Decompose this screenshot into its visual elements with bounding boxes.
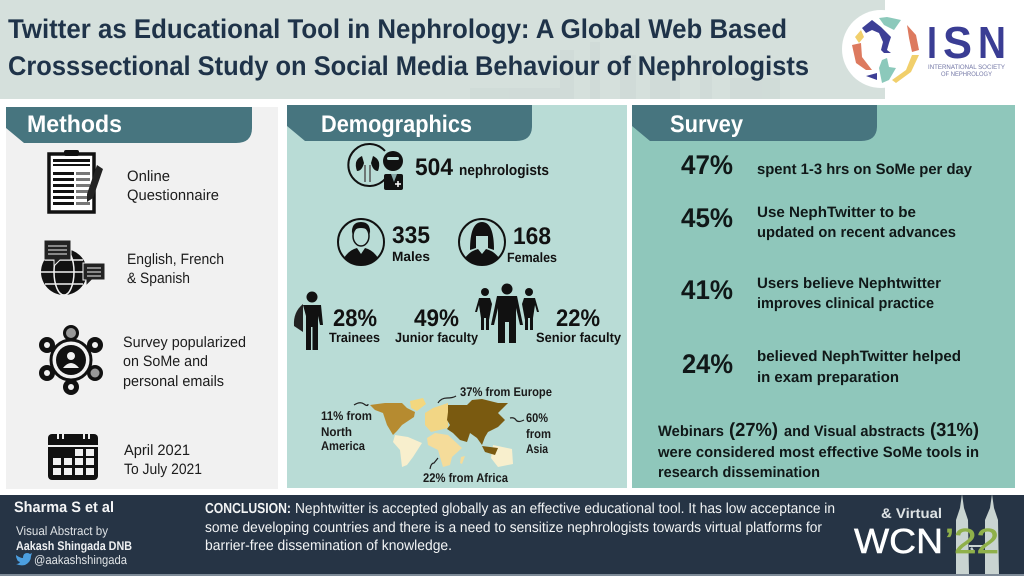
authors and credit: Visual Abstract by bbox=[16, 524, 109, 538]
text: webinars and visual abstracts: research dissemination bbox=[658, 464, 820, 481]
stat: 47%: 47% bbox=[681, 150, 733, 180]
ISN logo bbox=[842, 10, 1006, 88]
map labels: 22% from Africa bbox=[423, 471, 509, 485]
stat: trainees bbox=[329, 305, 380, 345]
stat: total nephrologists: nephrologists bbox=[459, 162, 549, 179]
icon: faculty group bbox=[475, 284, 539, 343]
survey heading tab bbox=[632, 105, 877, 141]
stat: males: 335 bbox=[392, 222, 430, 249]
text: webinars and visual abstracts: (31%) bbox=[930, 420, 979, 441]
conclusion text bbox=[205, 501, 835, 554]
icon: globe with speech bubbles bbox=[41, 240, 105, 295]
map labels: North bbox=[321, 425, 352, 439]
icon: kidney and doctor bbox=[348, 144, 403, 190]
stat: 45% bbox=[681, 203, 956, 241]
icon: social network bbox=[39, 325, 103, 395]
text: webinars and visual abstracts: and Visual abstracts bbox=[784, 423, 925, 440]
conclusion text: CONCLUSION: bbox=[205, 501, 291, 517]
text: languages bbox=[127, 251, 224, 287]
stat: 41%: Users believe Nephtwitter bbox=[757, 275, 941, 292]
stat: 45%: Use NephTwitter to be bbox=[757, 204, 916, 221]
icon: trainee with backpack bbox=[294, 292, 323, 350]
WCN 22 logo: & Virtual bbox=[881, 505, 942, 521]
WCN 22 logo: WCN bbox=[854, 522, 943, 561]
conclusion text: barrier-free dissemination of knowledge. bbox=[205, 538, 452, 554]
map labels: 60% bbox=[526, 411, 548, 425]
footer band bbox=[0, 494, 1024, 576]
icon: female doctor bbox=[459, 219, 505, 266]
stat: females: 168 bbox=[513, 223, 551, 250]
map labels: 11% from bbox=[321, 409, 372, 423]
stat: senior faculty bbox=[536, 305, 621, 345]
text: study dates: To July 2021 bbox=[124, 461, 202, 478]
text: survey popularized: personal emails bbox=[123, 373, 224, 390]
methods heading tab: Methods bbox=[27, 111, 122, 138]
ISN wordmark: INTERNATIONAL SOCIETY bbox=[928, 64, 1006, 71]
WCN 22 logo: ’22 bbox=[945, 522, 999, 561]
map labels bbox=[321, 385, 552, 485]
panel: survey bbox=[632, 105, 1015, 488]
stat: 24%: in exam preparation bbox=[757, 369, 899, 386]
stat: total nephrologists bbox=[415, 154, 549, 181]
text: webinars and visual abstracts: were considered most effective SoMe tools in bbox=[657, 444, 979, 461]
ISN wordmark: I bbox=[927, 17, 937, 68]
text: survey popularized: Survey popularized bbox=[123, 334, 246, 351]
text: webinars and visual abstracts: Webinars bbox=[658, 423, 724, 440]
text: online questionnaire: Online bbox=[127, 168, 170, 185]
stat: 47%: spent 1-3 hrs on SoMe per day bbox=[757, 161, 973, 178]
ISN wordmark bbox=[927, 17, 1006, 78]
text: webinars and visual abstracts bbox=[657, 420, 979, 481]
conclusion text: Nephtwitter is accepted globally as an effective educational tool. It has low acceptance in bbox=[295, 501, 835, 517]
stat: total nephrologists: 504 bbox=[415, 154, 454, 181]
stat: junior faculty bbox=[395, 305, 478, 345]
authors and credit bbox=[14, 499, 132, 567]
text: study dates bbox=[124, 442, 202, 478]
text: online questionnaire bbox=[127, 168, 219, 204]
icon: twin towers bbox=[956, 494, 999, 574]
text: webinars and visual abstracts: (27%) bbox=[729, 420, 778, 441]
stat: 41% bbox=[681, 275, 941, 312]
text: survey popularized: on SoMe and bbox=[123, 353, 208, 370]
stat: junior faculty: 49% bbox=[414, 305, 459, 332]
stat: 24%: 24% bbox=[682, 349, 733, 379]
WCN 22 logo bbox=[854, 494, 999, 574]
map labels: America bbox=[321, 439, 366, 453]
icon: twitter bird bbox=[16, 553, 32, 565]
stat: trainees: 28% bbox=[333, 305, 377, 332]
stat: 45%: 45% bbox=[681, 203, 733, 233]
map arrows bbox=[354, 396, 524, 469]
stat: trainees: Trainees bbox=[329, 330, 380, 345]
ISN wordmark: N bbox=[978, 17, 1006, 68]
demographics heading tab bbox=[287, 105, 532, 141]
title: Twitter as Educational Tool in Nephrology: A Global Web Based bbox=[8, 14, 787, 44]
stat: 24% bbox=[682, 348, 961, 386]
panel: methods bbox=[6, 107, 278, 489]
icon: questionnaire clipboard bbox=[49, 150, 103, 212]
stat: 41%: improves clinical practice bbox=[757, 295, 934, 312]
stat: males: Males bbox=[392, 249, 430, 264]
map labels: from bbox=[526, 427, 551, 441]
stat: senior faculty: Senior faculty bbox=[536, 330, 621, 345]
ISN wordmark: OF NEPHROLOGY bbox=[941, 71, 993, 78]
stat: 41%: 41% bbox=[681, 275, 733, 305]
map labels: Asia bbox=[526, 442, 549, 456]
text: survey popularized bbox=[123, 334, 246, 390]
text: study dates: April 2021 bbox=[124, 442, 190, 459]
authors and credit: Aakash Shingada DNB bbox=[16, 539, 132, 553]
demographics heading tab: Demographics bbox=[321, 111, 472, 138]
stat: females: Females bbox=[507, 250, 557, 265]
icon: male doctor bbox=[338, 219, 384, 266]
panel: demographics bbox=[287, 105, 627, 488]
stat: females bbox=[507, 223, 557, 265]
stat: senior faculty: 22% bbox=[556, 305, 600, 332]
icon: calendar bbox=[48, 430, 98, 480]
authors and credit: @aakashshingada bbox=[34, 553, 127, 567]
stat: 47% bbox=[681, 150, 973, 180]
header band with title bbox=[0, 0, 885, 99]
stat: junior faculty: Junior faculty bbox=[395, 330, 478, 345]
text: languages: English, French bbox=[127, 251, 224, 268]
stat: 45%: updated on recent advances bbox=[757, 224, 956, 241]
title bbox=[8, 14, 809, 81]
map labels: 37% from Europe bbox=[460, 385, 552, 399]
stat: 24%: believed NephTwitter helped bbox=[757, 348, 961, 365]
authors and credit: Sharma S et al bbox=[14, 499, 114, 516]
survey heading tab: Survey bbox=[670, 111, 744, 138]
title: Crosssectional Study on Social Media Behaviour of Nephrologists bbox=[8, 51, 809, 81]
world map bbox=[321, 385, 552, 485]
stat: males bbox=[392, 222, 430, 264]
text: online questionnaire: Questionnaire bbox=[127, 187, 219, 204]
methods heading tab bbox=[6, 107, 252, 143]
text: languages: & Spanish bbox=[127, 270, 190, 287]
ISN wordmark: S bbox=[943, 17, 972, 68]
conclusion text: some developing countries and there is a need to sensitize nephrologists towards virtual platforms for bbox=[205, 520, 822, 536]
